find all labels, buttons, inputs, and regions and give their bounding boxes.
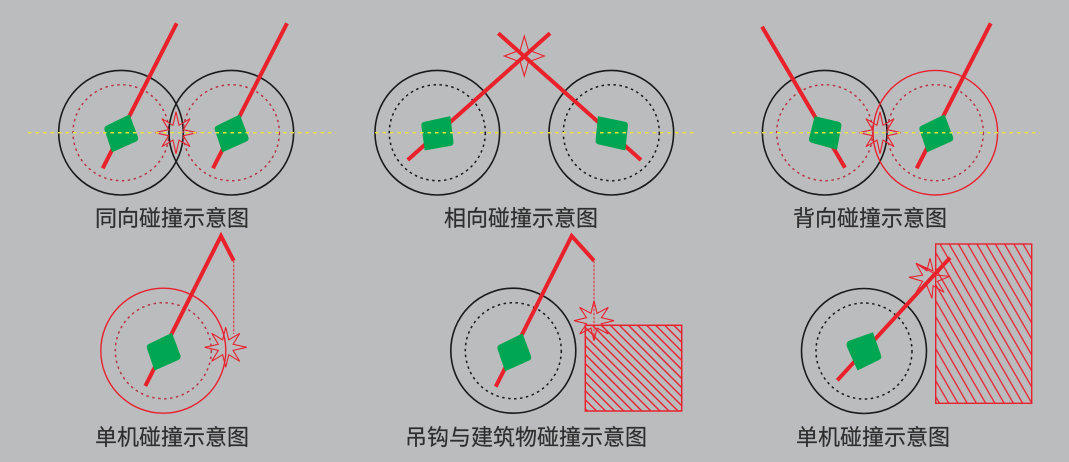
collision star bbox=[205, 327, 247, 367]
right crane slewing circles bbox=[549, 70, 674, 195]
centre line bbox=[732, 132, 1040, 134]
panel: opposing collision bbox=[375, 33, 697, 231]
collision star bbox=[859, 112, 901, 154]
caption: 背向碰撞示意图 bbox=[793, 206, 947, 231]
boom bbox=[837, 258, 950, 380]
boom with bent tip bbox=[145, 236, 234, 386]
hook rope bbox=[593, 261, 595, 340]
panel: single crane hook collision bbox=[95, 236, 249, 450]
building hatched block bbox=[585, 325, 682, 411]
right crane cab bbox=[920, 115, 953, 152]
caption: 相向碰撞示意图 bbox=[444, 206, 598, 231]
slewing circles bbox=[101, 288, 226, 413]
panel: boom and building collision bbox=[796, 244, 1032, 450]
slewing circles bbox=[802, 288, 926, 414]
right crane slewing circles bbox=[169, 70, 294, 195]
caption: 单机碰撞示意图 bbox=[796, 425, 950, 450]
panel: same-direction collision bbox=[28, 23, 336, 231]
right crane boom bbox=[917, 23, 991, 168]
right crane boom bbox=[213, 23, 287, 168]
left crane boom bbox=[762, 27, 845, 168]
right crane slewing circles bbox=[873, 70, 998, 195]
left crane boom bbox=[408, 33, 550, 160]
collision star bbox=[155, 112, 197, 154]
caption: 同向碰撞示意图 bbox=[95, 206, 249, 231]
collision star bbox=[574, 301, 614, 341]
left crane boom bbox=[103, 23, 177, 168]
left crane cab bbox=[809, 117, 841, 149]
left crane cab bbox=[422, 117, 453, 150]
collision star bbox=[909, 258, 950, 298]
panel: back-to-back collision bbox=[732, 23, 1040, 231]
crane cab bbox=[147, 333, 180, 370]
left crane slewing circles bbox=[375, 70, 500, 195]
right crane cab bbox=[215, 115, 248, 152]
panel: hook and building collision bbox=[405, 236, 682, 450]
right crane boom bbox=[498, 33, 641, 160]
building hatched block bbox=[936, 244, 1032, 403]
left crane slewing circles bbox=[762, 70, 887, 195]
boom with bent tip bbox=[496, 236, 594, 387]
crane cab bbox=[847, 333, 881, 370]
centre line bbox=[28, 132, 336, 134]
centre line bbox=[375, 132, 697, 134]
caption: 吊钩与建筑物碰撞示意图 bbox=[405, 425, 647, 450]
left crane cab bbox=[105, 115, 138, 152]
slewing circles bbox=[451, 288, 576, 413]
left crane slewing circles bbox=[59, 70, 183, 195]
right crane cab bbox=[596, 117, 628, 150]
caption: 单机碰撞示意图 bbox=[95, 425, 249, 450]
crane cab bbox=[498, 334, 531, 371]
collision star bbox=[504, 36, 544, 76]
hook rope bbox=[233, 261, 235, 334]
